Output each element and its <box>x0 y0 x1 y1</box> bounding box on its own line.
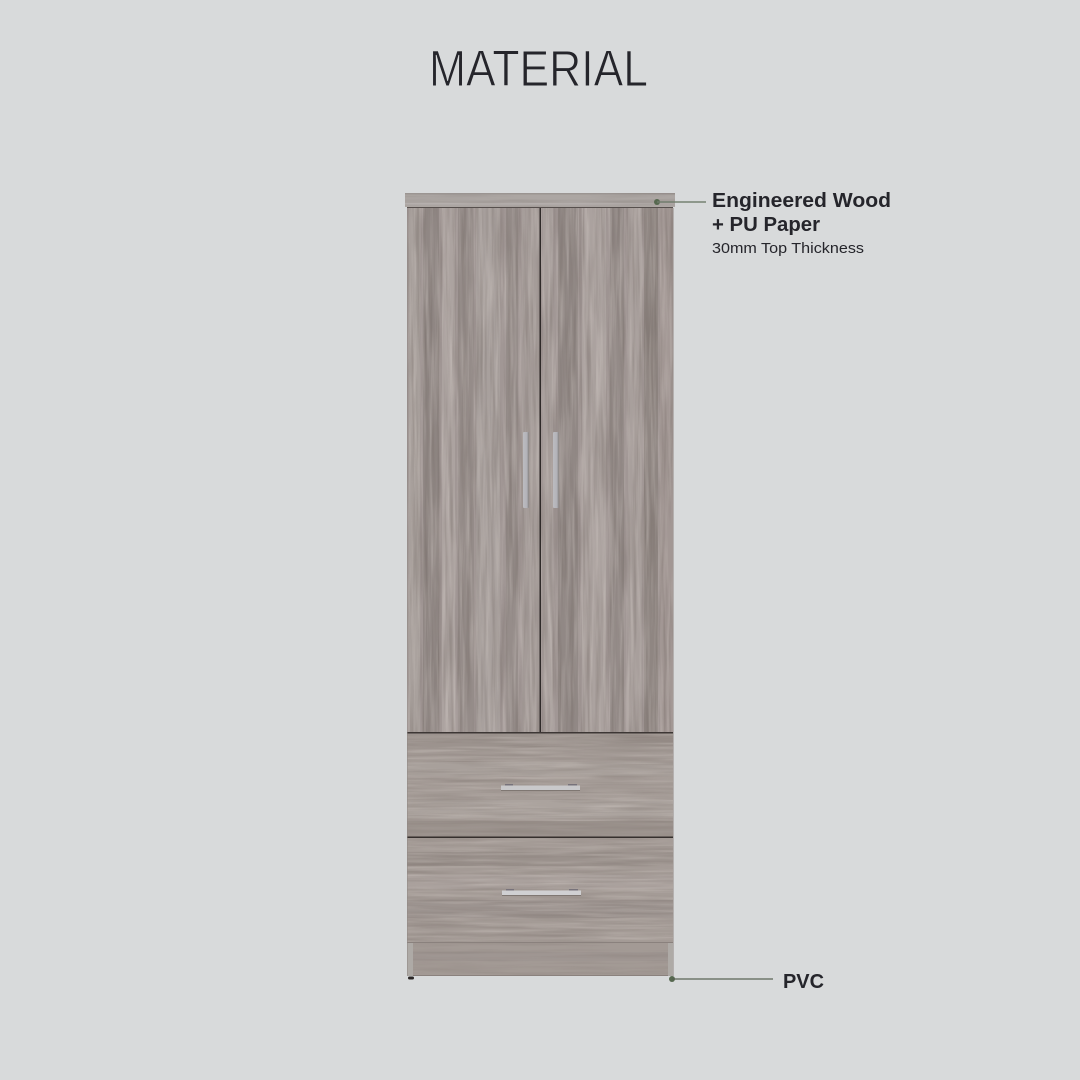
drawer handle lower <box>502 889 581 896</box>
upper drawer <box>408 734 673 836</box>
right door <box>541 208 673 732</box>
wardrobe carcass <box>407 208 674 976</box>
callout heading: Engineered Wood <box>712 190 891 212</box>
door bottom gap <box>408 732 673 734</box>
pvc marker <box>669 976 773 982</box>
lower drawer <box>408 838 673 942</box>
callout detail: 30mm Top Thickness <box>712 240 864 257</box>
plinth <box>408 942 673 976</box>
wardrobe top board <box>405 193 675 208</box>
foot left <box>408 976 414 980</box>
drawer gap <box>408 836 673 838</box>
door handle right <box>553 432 559 508</box>
door handle left <box>523 432 529 508</box>
callout marker <box>654 199 706 205</box>
door gap <box>540 208 541 732</box>
drawer handle upper <box>501 784 580 791</box>
left door <box>408 208 540 732</box>
callout heading line two: + PU Paper <box>712 214 820 236</box>
callout: engineered wood <box>654 190 891 257</box>
title: MATERIAL <box>429 40 648 97</box>
callout: pvc <box>669 971 824 993</box>
pvc label: PVC <box>783 971 824 993</box>
wardrobe illustration <box>405 193 675 980</box>
